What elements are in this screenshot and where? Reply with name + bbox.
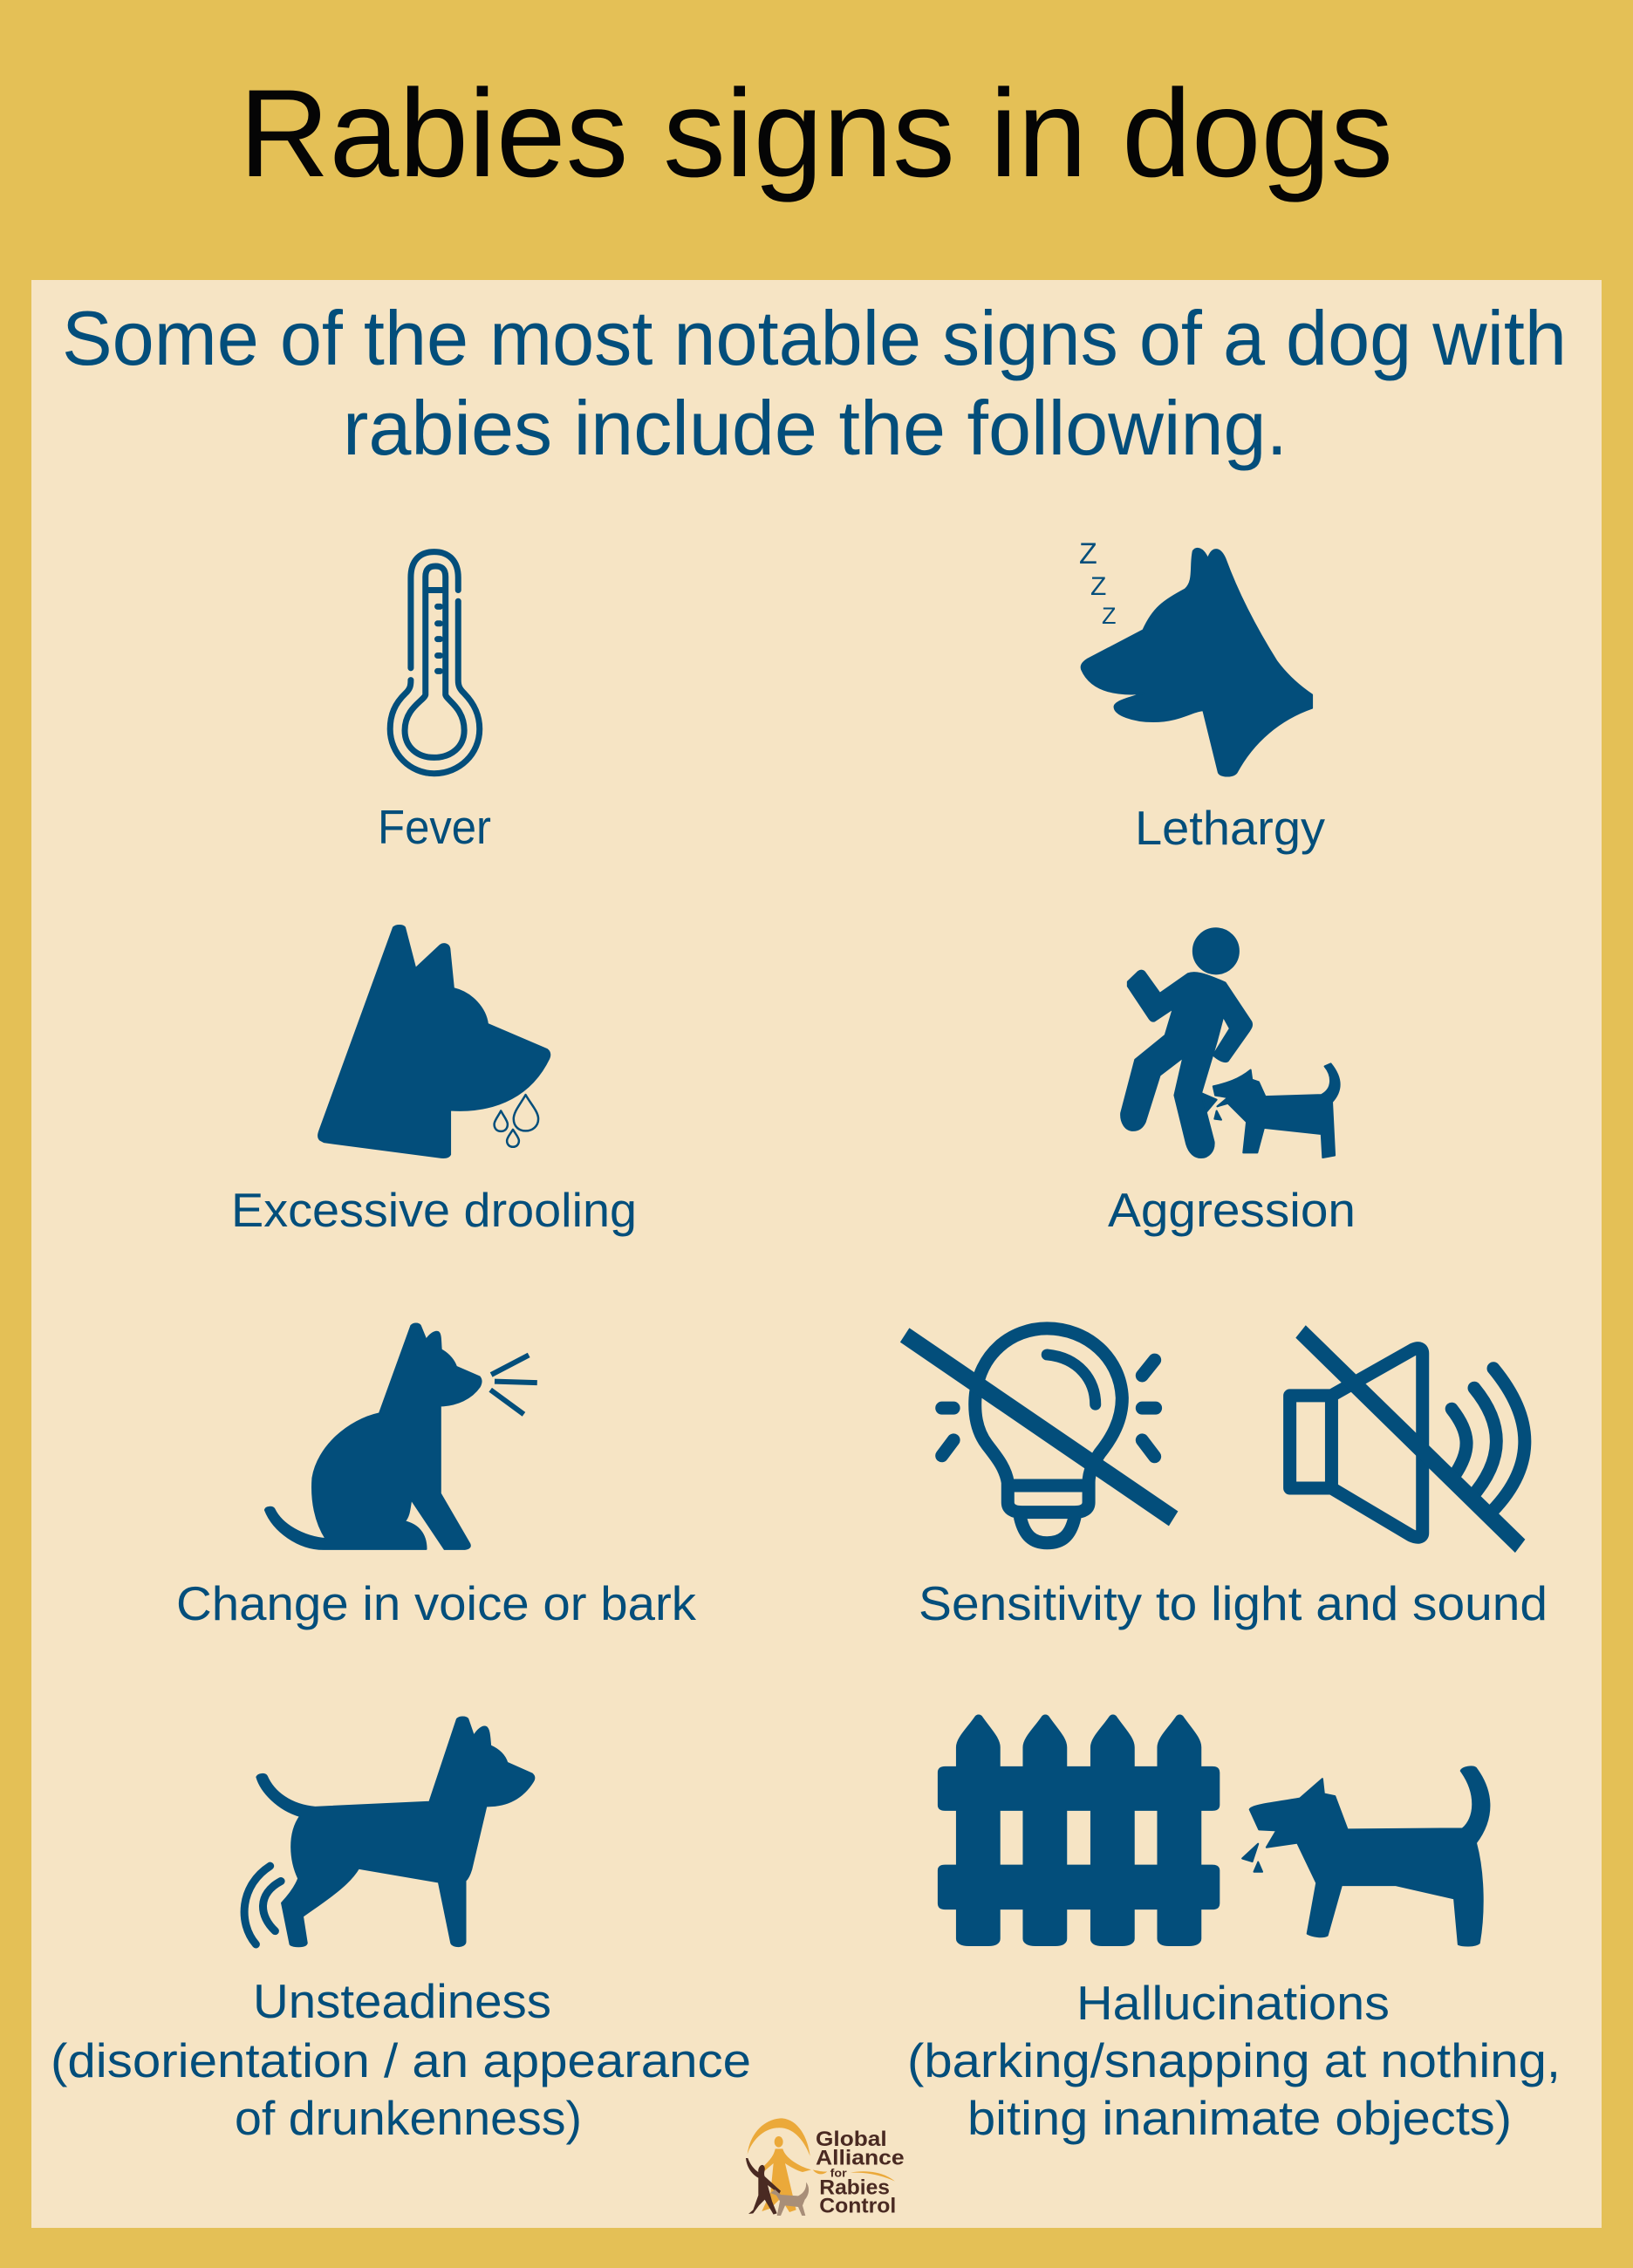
label: lethargy: Lethargy — [1135, 801, 1326, 855]
subtitle: rabies include the following. — [343, 385, 1288, 471]
icon: unsteady dog — [244, 1718, 534, 1946]
icon: dog snapping at nothing — [1242, 1766, 1489, 1946]
label: hallucinations: (barking/snapping at nothing, — [907, 2033, 1561, 2087]
label: hallucinations: Hallucinations — [1076, 1976, 1390, 2030]
logo: Global Alliance for Rabies Control: Alliance — [816, 2147, 905, 2170]
icon: drooling dog head — [318, 926, 550, 1158]
icon: zzz — [1079, 537, 1117, 629]
logo: Global Alliance for Rabies Control — [746, 2118, 905, 2218]
icon: thermometer — [390, 552, 480, 774]
icon: fence — [939, 1715, 1219, 1945]
label: unsteadiness — [51, 1974, 751, 2145]
title: Rabies signs in dogs — [239, 65, 1393, 203]
icon: crossed-out speaker — [1290, 1325, 1525, 1553]
label: fever: Fever — [378, 800, 491, 854]
label: hallucinations: biting inanimate objects) — [967, 2091, 1512, 2145]
label: hallucinations — [907, 1976, 1561, 2145]
label: sensitivity to light and sound: Sensitivity to light and sound — [919, 1576, 1548, 1630]
subtitle — [62, 295, 1567, 471]
icon: zzz: Z — [1102, 603, 1117, 629]
label: excessive drooling: Excessive drooling — [231, 1183, 637, 1237]
icon: crossed-out light bulb — [900, 1328, 1178, 1543]
label: aggression: Aggression — [1108, 1183, 1356, 1237]
logo: Global Alliance for Rabies Control: Global — [816, 2128, 887, 2151]
icon: dog biting person — [1121, 928, 1340, 1158]
label: change in voice or bark: Change in voice or bark — [176, 1576, 697, 1630]
icon: sleeping dog head — [1082, 549, 1312, 776]
icon: zzz: Z — [1090, 572, 1106, 601]
logo: Global Alliance for Rabies Control: for — [830, 2168, 847, 2180]
icon: barking dog — [265, 1323, 537, 1549]
logo: Global Alliance for Rabies Control: Control — [819, 2195, 896, 2218]
subtitle: Some of the most notable signs of a dog with — [62, 295, 1567, 381]
logo: Global Alliance for Rabies Control: Rabies — [819, 2176, 890, 2200]
label: unsteadiness: (disorientation / an appearance — [51, 2033, 751, 2087]
label: unsteadiness: Unsteadiness — [253, 1974, 551, 2028]
label: unsteadiness: of drunkenness) — [235, 2091, 582, 2145]
icon: zzz: Z — [1079, 537, 1097, 570]
